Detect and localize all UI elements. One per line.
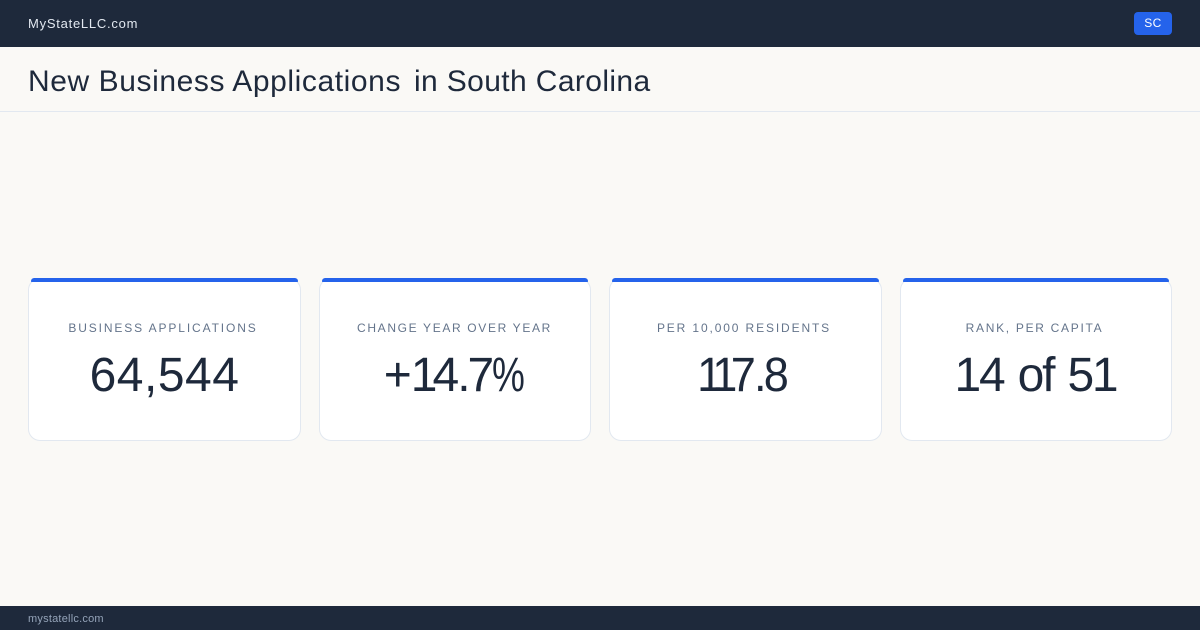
footer url: mystatellc.com: [28, 613, 104, 625]
value: +14.7: [384, 349, 492, 402]
label: BUSINESS APPLICATIONS: [68, 321, 258, 335]
title: New Business Applications in South Carolina: [28, 65, 651, 98]
top navigation bar: [0, 0, 1200, 47]
title band: [0, 47, 1200, 112]
label: RANK, PER CAPITA: [966, 321, 1103, 335]
stat card: change year over year: [319, 278, 591, 441]
brand name: MyStateLLC.com: [28, 16, 138, 31]
label: CHANGE YEAR OVER YEAR: [357, 321, 552, 335]
label: PER 10,000 RESIDENTS: [657, 321, 831, 335]
stat card: per 10,000 residents: [609, 278, 882, 441]
state badge: SC: [1144, 16, 1162, 30]
footer bar: [0, 606, 1200, 630]
stat card: business applications: [28, 278, 301, 441]
value: 117.8: [697, 349, 789, 402]
value: 14 of 51: [955, 349, 1116, 402]
state badge: [1134, 12, 1172, 35]
stat card: rank per capita: [900, 278, 1172, 441]
value: %: [492, 349, 525, 402]
value: 64,544: [90, 349, 239, 402]
